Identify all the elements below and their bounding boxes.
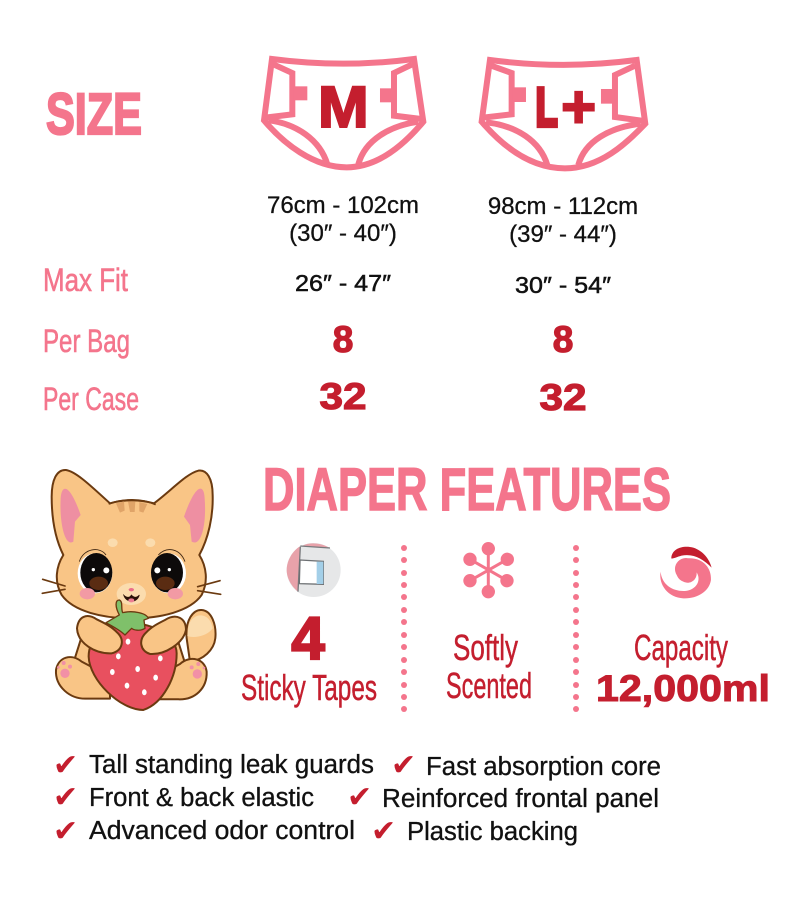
strawberry leaf bbox=[106, 600, 148, 635]
icon: diaper size L+: + bbox=[561, 73, 596, 140]
feature: capacity: 12,000ml bbox=[596, 668, 770, 709]
check marks: ✔ bbox=[347, 780, 372, 815]
icon: sticky tape bbox=[287, 543, 341, 597]
stripes on forehead bbox=[116, 501, 147, 513]
row label: per bag: Per Bag bbox=[43, 323, 130, 359]
strawberry bbox=[89, 623, 177, 710]
max fit M: 26″ - 47″ bbox=[295, 270, 391, 296]
waist measurement: M bbox=[267, 192, 419, 247]
feature: capacity: Capacity bbox=[634, 627, 728, 668]
feature: 4 sticky tapes bbox=[241, 605, 377, 708]
check marks: ✔ bbox=[391, 748, 416, 783]
icon: diaper size L+ bbox=[482, 60, 645, 168]
checklist labels: Tall standing leak guards bbox=[89, 751, 374, 779]
row label: max fit: Max Fit bbox=[43, 262, 128, 298]
feature: softly scented: Softly bbox=[453, 627, 518, 668]
divider dots 2 bbox=[573, 545, 579, 712]
head bbox=[52, 470, 213, 618]
checklist labels: Reinforced frontal panel bbox=[382, 785, 659, 813]
per case L+: 32 bbox=[540, 377, 586, 418]
check marks bbox=[53, 748, 416, 849]
waist measurement: L+: 98cm - 112cm bbox=[488, 193, 638, 220]
check marks: ✔ bbox=[53, 814, 78, 849]
arms bbox=[77, 616, 186, 654]
check marks: ✔ bbox=[53, 748, 78, 783]
feature: 4 sticky tapes: Sticky Tapes bbox=[241, 667, 377, 708]
divider dots 1 bbox=[401, 545, 407, 712]
checklist: product benefits bbox=[53, 748, 661, 849]
check marks: ✔ bbox=[371, 814, 396, 849]
checklist labels: Fast absorption core bbox=[426, 753, 661, 781]
whiskers bbox=[42, 579, 221, 594]
feature: softly scented: Scented bbox=[446, 665, 532, 706]
per bag M: 8 bbox=[333, 319, 353, 360]
feature: softly scented bbox=[446, 627, 532, 706]
muzzle bbox=[117, 583, 146, 605]
feature: 4 sticky tapes: 4 bbox=[291, 605, 325, 672]
icon: diaper size M bbox=[264, 59, 423, 167]
checklist labels: Plastic backing bbox=[407, 818, 578, 846]
check marks: ✔ bbox=[53, 780, 78, 815]
feature: capacity bbox=[596, 627, 770, 709]
checklist labels: Front & back elastic bbox=[89, 784, 314, 812]
brow spots bbox=[108, 538, 118, 547]
icon: diaper size M: M bbox=[318, 76, 369, 140]
checklist labels: Advanced odor control bbox=[89, 817, 355, 845]
eyes bbox=[78, 553, 112, 593]
icon: diaper size L+: L bbox=[536, 76, 558, 138]
per bag L+: 8 bbox=[553, 319, 573, 360]
heading: size: SIZE bbox=[46, 82, 142, 147]
waist measurement: L+ bbox=[488, 193, 638, 248]
icon: scent molecule bbox=[463, 542, 514, 598]
waist measurement: L+: (39″ - 44″) bbox=[509, 221, 617, 248]
checklist labels bbox=[89, 751, 661, 846]
ears inner bbox=[60, 489, 81, 542]
mascot: kitten hugging a strawberry bbox=[42, 470, 221, 710]
cheeks bbox=[80, 588, 95, 599]
paw pads bbox=[57, 661, 205, 679]
max fit L+: 30″ - 54″ bbox=[515, 272, 611, 298]
icon: absorption swirl bbox=[660, 547, 712, 598]
waist measurement: M: 76cm - 102cm bbox=[267, 192, 419, 219]
row label: per case: Per Case bbox=[43, 381, 139, 417]
waist measurement: M: (30″ - 40″) bbox=[289, 220, 397, 247]
per case M: 32 bbox=[320, 376, 366, 417]
